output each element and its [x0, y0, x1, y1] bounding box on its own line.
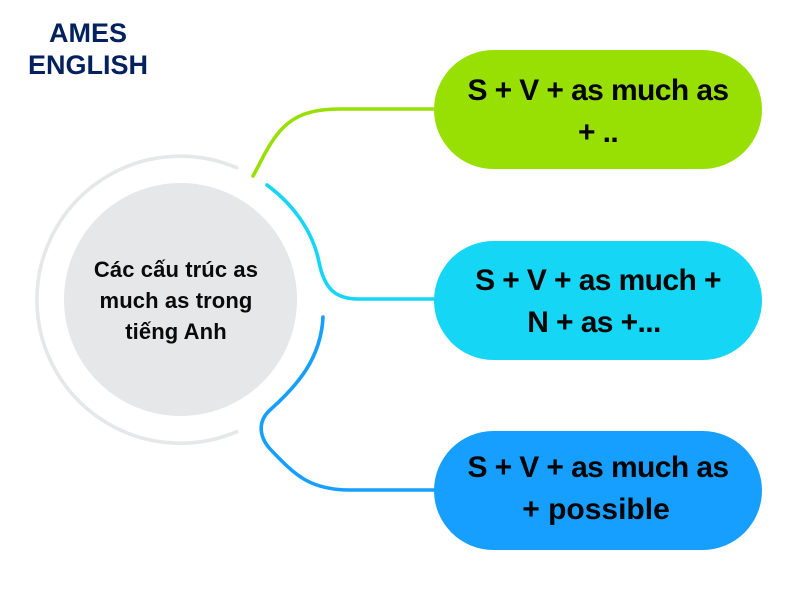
- connector: green: [253, 109, 436, 176]
- pill: structure 3: S + V + as much as: [467, 450, 729, 484]
- pill: structure 3: + possible: [522, 492, 670, 526]
- pill: structure 1: S + V + as much as: [467, 74, 729, 106]
- center circle: topic: tiếng Anh: [125, 319, 227, 344]
- pill: structure 2: N + as +...: [527, 306, 661, 338]
- center circle: topic: [64, 183, 297, 416]
- logo: AMES English: ENGLISH: [28, 50, 148, 80]
- pill: structure 1: + ..: [578, 116, 618, 148]
- center circle: topic: Các cấu trúc as: [94, 257, 258, 282]
- logo: AMES English: [28, 18, 148, 80]
- outer ring arc: [37, 156, 237, 443]
- center circle: topic: much as trong: [100, 288, 252, 313]
- logo: AMES English: AMES: [49, 18, 127, 48]
- pill: structure 2: [434, 241, 762, 360]
- pill: structure 3: [434, 431, 762, 550]
- connector: cyan: [267, 185, 436, 299]
- pill: structure 2: S + V + as much +: [475, 264, 721, 296]
- connector: blue: [261, 317, 436, 490]
- pill: structure 1: [434, 50, 762, 169]
